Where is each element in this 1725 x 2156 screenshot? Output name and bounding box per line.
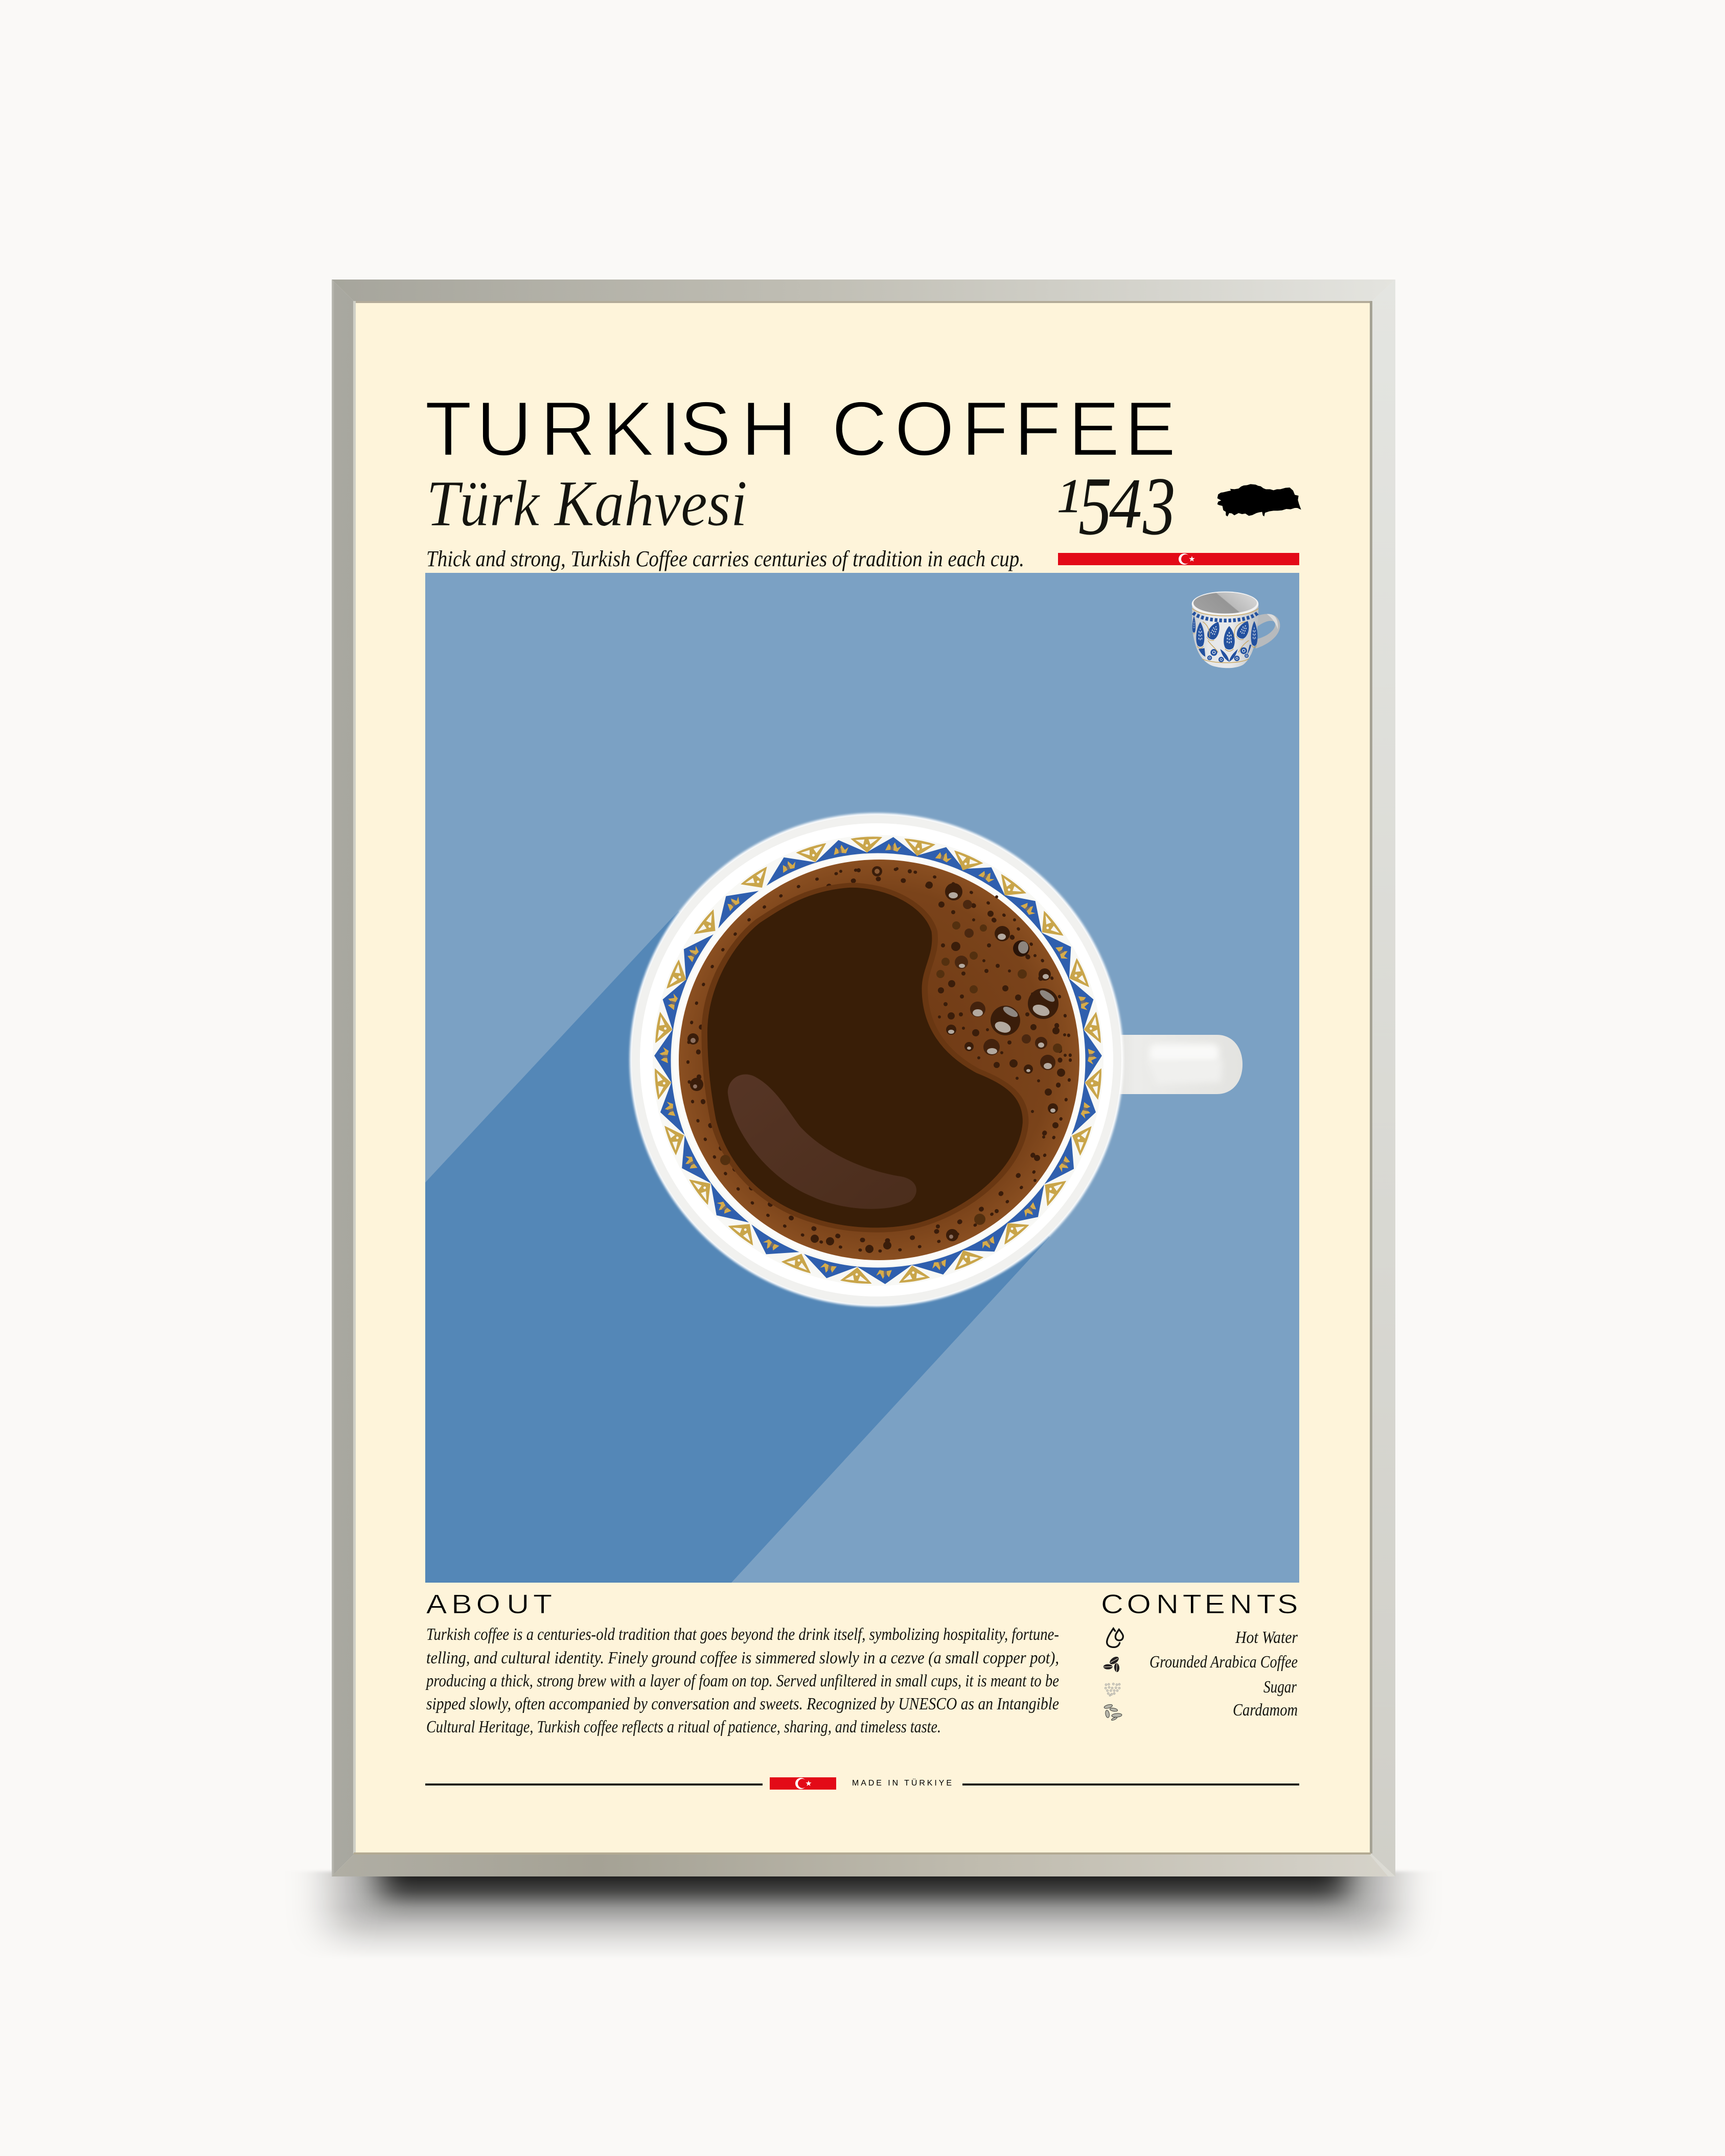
label: cardamom: Cardamom [1233,1701,1298,1720]
long cast shadow [425,911,1050,1583]
main coffee cup illustration (top view) [630,813,1243,1307]
ornamental ring of blue and gold triangles [654,835,1102,1285]
heading: contents: CONTENTS [1101,1589,1298,1619]
dark coffee centre [704,885,1026,1230]
footer: made in Türkiye [425,1777,1299,1790]
panel: poster paper [353,301,1372,1854]
subtitle: native name: Türk Kahvesi [426,467,747,540]
icon: coffee beans [1103,1655,1120,1672]
flag bar [1058,553,1299,565]
heading: about: ABOUT [426,1589,552,1619]
dotted foam edge bubbles [688,869,1070,1251]
year: 1 [1057,469,1082,522]
year: 4 [1109,464,1142,543]
bubble highlights [691,869,1056,1239]
year: 5 [1078,459,1112,552]
text block: about paragraph [425,1625,1059,1736]
panel: blue illustration field [425,573,1299,1583]
coffee foam surface [679,860,1079,1260]
label: grounded arabica coffee: Grounded Arabica Coffee [1149,1653,1298,1672]
title: TURKISH COFFEE [425,385,1176,472]
contents list [1103,1628,1298,1721]
label: sugar: Sugar [1263,1678,1297,1697]
text block: about paragraph: Turkish coffee is a centuries-old tradition that goes beyond the drink itself, symbolizing hospitality, fortune- [426,1625,1059,1644]
picture frame [332,280,1395,1876]
year [1057,459,1176,552]
cup rim [630,813,1123,1307]
cup handle [1099,1035,1243,1094]
text block: about paragraph: sipped slowly, often accompanied by conversation and sweets. Recognized by UNESCO as an Intangible [426,1695,1059,1713]
foam bubbles [687,866,1067,1253]
icon: hot water drops [1107,1629,1123,1647]
made in label: MADE IN TÜRKIYE [852,1778,952,1788]
inner white lip [673,854,1085,1266]
label: hot water: Hot Water [1235,1628,1298,1647]
text block: about paragraph: telling, and cultural identity. Finely ground coffee is simmered slowly in a cezve (a small copper pot), [426,1649,1059,1667]
tagline: Thick and strong, Turkish Coffee carries centuries of tradition in each cup. [426,546,1024,571]
small Turkish flag [770,1777,836,1790]
icon: sugar grains [1105,1683,1120,1696]
icon: cardamom pods [1103,1704,1122,1721]
reflection on coffee [728,1074,916,1209]
text block: about paragraph: Cultural Heritage, Turkish coffee reflects a ritual of patience, sharing, and timeless taste. [426,1718,941,1736]
year: 3 [1142,460,1176,552]
icon: map of Turkey silhouette [1217,484,1301,517]
icon: decorated porcelain cup [1192,591,1280,668]
frame floor shadow [332,1871,1395,1959]
text block: about paragraph: producing a thick, strong brew with a layer of foam on top. Served unfiltered in small cups, it is meant to be [425,1672,1059,1690]
